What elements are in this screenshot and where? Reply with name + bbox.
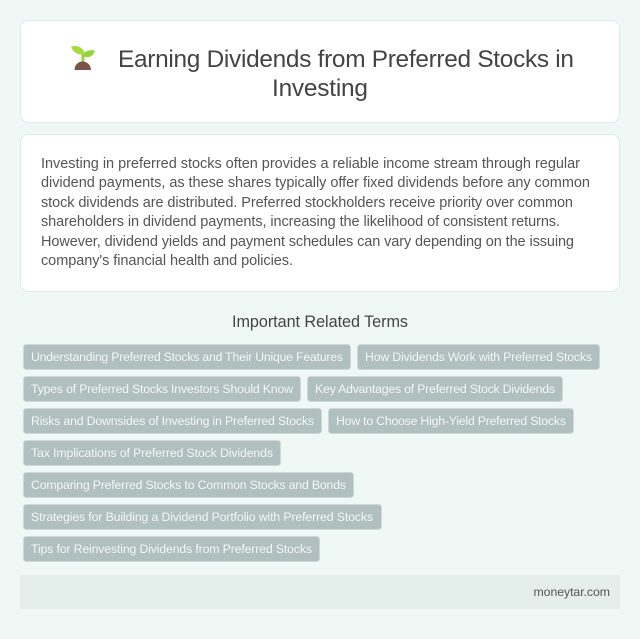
chip: tax implications: Tax Implications of Preferred Stock Dividends bbox=[31, 446, 273, 460]
text block: description: company's financial health and policies. bbox=[41, 253, 293, 269]
chip: reinvesting tips bbox=[24, 536, 320, 562]
panel: description text bbox=[20, 134, 620, 292]
footer bbox=[20, 575, 620, 609]
chip: how dividends work bbox=[358, 344, 600, 370]
chip: key advantages: Key Advantages of Preferred Stock Dividends bbox=[315, 382, 555, 396]
panel: title card bbox=[20, 20, 620, 122]
chip: comparing stocks and bonds: Comparing Preferred Stocks to Common Stocks and Bonds bbox=[31, 478, 346, 492]
chip: understanding preferred stocks: Understanding Preferred Stocks and Their Unique Features bbox=[31, 350, 343, 364]
panel: related term chips bbox=[24, 344, 600, 562]
chip: risks and downsides: Risks and Downsides of Investing in Preferred Stocks bbox=[31, 414, 314, 428]
chip: choosing high-yield bbox=[328, 408, 574, 434]
chip: risks and downsides bbox=[24, 408, 322, 434]
text block: description bbox=[41, 156, 590, 269]
chip: reinvesting tips: Tips for Reinvesting Dividends from Preferred Stocks bbox=[31, 542, 312, 556]
chip: types of preferred stocks bbox=[24, 376, 300, 402]
text block: description: stock dividends are distributed. Preferred stockholders receive priority over common bbox=[41, 195, 573, 211]
icon: seedling bbox=[71, 46, 95, 70]
text block: description: shareholders in dividend payments, increasing the likelihood of consistent returns. bbox=[41, 214, 560, 230]
chip: dividend portfolio strategies: Strategies for Building a Dividend Portfolio with Preferred Stocks bbox=[31, 510, 373, 524]
title: Investing bbox=[272, 75, 368, 102]
text block: description: Investing in preferred stocks often provides a reliable income stream through regular bbox=[41, 156, 580, 172]
heading: important related terms: Important Related Terms bbox=[232, 313, 408, 331]
chip: key advantages bbox=[308, 376, 562, 402]
chip: tax implications bbox=[24, 440, 280, 466]
title bbox=[118, 46, 574, 102]
footer source text: moneytar.com bbox=[534, 585, 610, 599]
text block: description: However, dividend yields and payment schedules can vary depending on the issuing bbox=[41, 234, 574, 250]
title: Earning Dividends from Preferred Stocks in bbox=[118, 46, 574, 73]
text block: description: dividend payments, as these shares typically offer fixed dividends before any common bbox=[41, 175, 590, 191]
chip: how dividends work: How Dividends Work with Preferred Stocks bbox=[365, 350, 592, 364]
chip: dividend portfolio strategies bbox=[24, 504, 382, 530]
chip: comparing stocks and bonds bbox=[24, 472, 354, 498]
chip: understanding preferred stocks bbox=[24, 344, 350, 370]
chip: choosing high-yield: How to Choose High-Yield Preferred Stocks bbox=[336, 414, 566, 428]
chip: types of preferred stocks: Types of Preferred Stocks Investors Should Know bbox=[31, 382, 293, 396]
